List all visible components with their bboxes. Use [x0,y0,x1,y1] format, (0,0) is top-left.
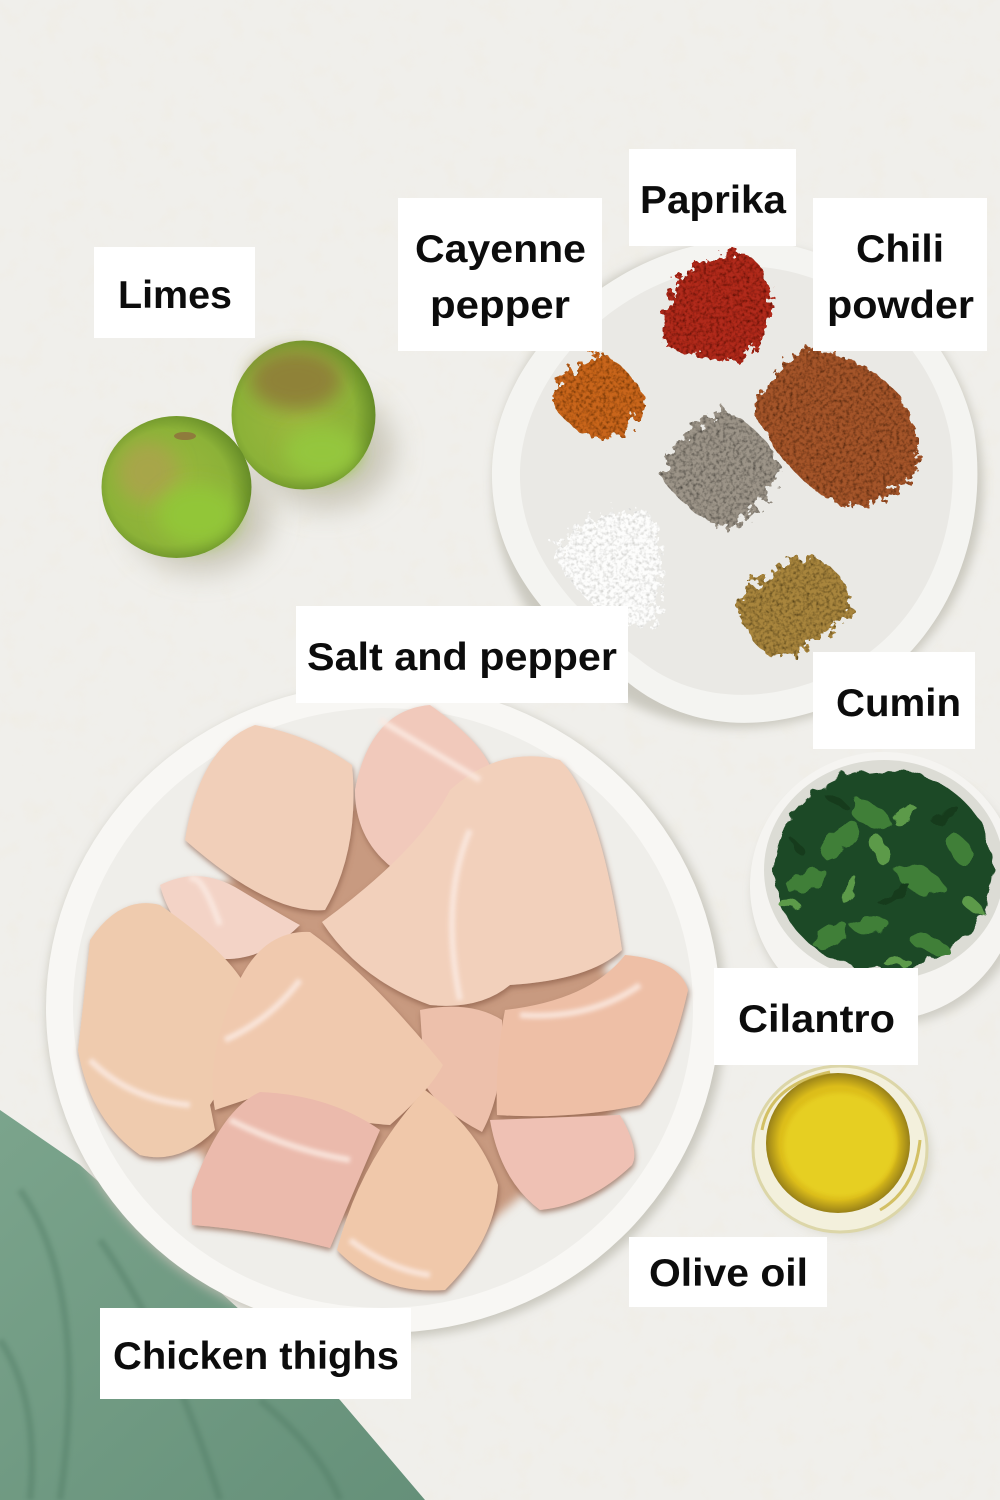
spice plate [492,240,983,728]
label: Cayenne pepper [398,198,602,351]
label: Cayenne pepper: Cayenne [415,228,586,271]
green napkin [0,1110,425,1500]
lime right [232,340,376,490]
cilantro bowl [750,752,1000,1025]
label: Limes [94,247,255,338]
label: Olive oil: Olive oil [649,1252,808,1295]
chicken thighs [78,705,688,1290]
label: Chili powder [813,198,987,351]
label: Chili powder: powder [827,284,974,327]
spice: black pepper [660,410,780,530]
label: Chili powder: Chili [856,228,944,271]
cilantro leaves [774,770,994,970]
label: Salt and pepper [296,606,628,703]
spice: salt [556,512,662,627]
label: Limes: Limes [118,274,232,317]
limes [102,340,395,573]
spice: chili powder [756,348,918,508]
spice: paprika [664,253,772,360]
spice: cumin [738,556,852,658]
label: Cilantro [714,968,918,1065]
chicken plate [46,683,726,1338]
label: Cumin: Cumin [836,682,961,725]
label: Cumin [813,652,975,749]
olive oil bowl [753,1066,931,1234]
label: Cilantro: Cilantro [738,998,895,1041]
label: Chicken thighs: Chicken thighs [113,1335,399,1378]
label: Salt and pepper: Salt and pepper [307,636,617,679]
label: Chicken thighs [100,1308,411,1399]
lime left [102,416,252,558]
label: Paprika [629,149,796,246]
label: Paprika: Paprika [640,179,786,222]
label: Cayenne pepper: pepper [430,284,570,327]
chicken underlay shadow [130,800,650,1230]
spice: cayenne [552,352,646,440]
label: Olive oil [629,1237,827,1307]
